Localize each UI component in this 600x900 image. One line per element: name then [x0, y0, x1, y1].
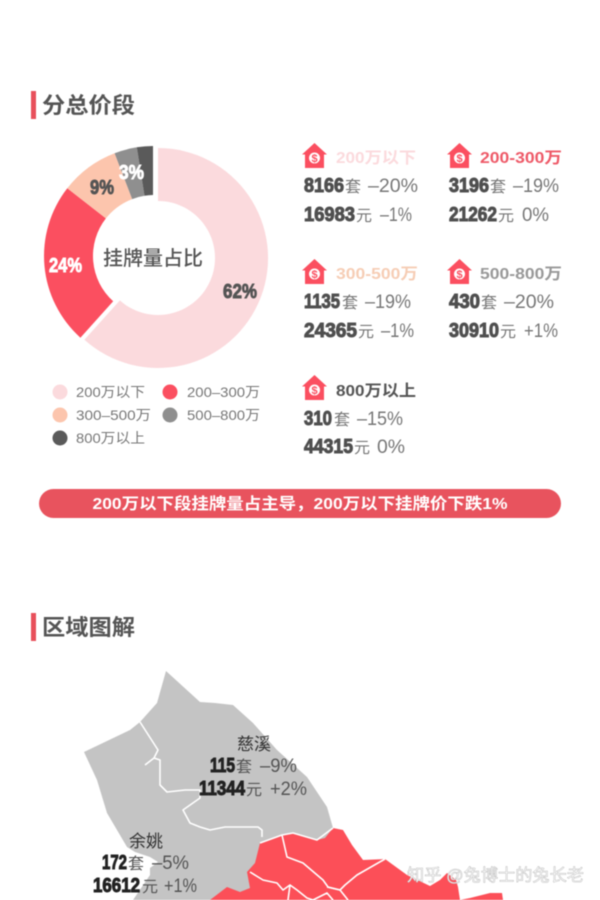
- legend: 200万以下: [76, 384, 145, 400]
- icon: house with dollar: $: [311, 269, 318, 281]
- stat block: over 8M: 800万以上: [336, 382, 416, 400]
- stat block: 3-5M: 套: [342, 294, 358, 312]
- stat block: 2-3M: 21262: [449, 204, 497, 226]
- district label: 余姚: 元: [142, 879, 158, 896]
- legend: 800万以上: [76, 430, 145, 446]
- slice: 5-8M: [115, 147, 144, 199]
- stat block: 3-5M: 1135: [304, 291, 340, 313]
- stat block: 2-3M: 0%: [522, 205, 549, 226]
- legend: [52, 384, 260, 446]
- legend: 500–800万: [187, 407, 260, 423]
- stat block: 2-3M: 元: [498, 208, 514, 225]
- stat block: 3-5M: 300-500万: [336, 266, 418, 283]
- icon: house with dollar: $: [311, 385, 318, 397]
- stat block: under 2M: 元: [356, 208, 372, 225]
- stat block: over 8M: 310: [304, 408, 332, 430]
- district label: 慈溪: –9%: [260, 756, 297, 777]
- stat block: 3-5M: 元: [358, 324, 374, 341]
- watermark: 知乎 @兔博士的兔长老: [407, 866, 584, 885]
- stat block: 5-8M: 元: [500, 324, 516, 341]
- stat block: 3-5M: 24365: [304, 320, 357, 342]
- map region: red districts: [210, 828, 503, 900]
- stat block: under 2M: 16983: [304, 204, 355, 226]
- stat block: 2-3M: –19%: [513, 176, 559, 197]
- map borders: [140, 722, 385, 900]
- map region: grey districts: [84, 671, 345, 900]
- label: 24%: 24%: [49, 255, 82, 277]
- donut chart: listing share: [44, 146, 268, 368]
- label: 9%: 9%: [90, 177, 114, 199]
- district label: 余姚: 套: [128, 855, 144, 873]
- stat block: 5-8M: 500-800万: [480, 266, 562, 283]
- district label: 余姚: –5%: [152, 853, 189, 874]
- stat block: over 8M: 元: [354, 440, 370, 457]
- stat block: 5-8M: 430: [449, 291, 480, 313]
- district label: 慈溪: 元: [246, 782, 262, 799]
- stat block: 2-3M: 3196: [449, 175, 489, 197]
- icon: house with dollar: $: [456, 269, 463, 281]
- district label: 余姚: [93, 832, 197, 897]
- district label: 余姚: 余姚: [129, 832, 163, 851]
- section heading: 区域图解: 区域图解: [42, 615, 135, 640]
- icon: house with dollar: $: [456, 153, 463, 165]
- slice: 2-3M 24%: [44, 188, 113, 338]
- district label: 慈溪: 11344: [199, 778, 246, 800]
- stat block: over 8M: 套: [334, 411, 350, 429]
- donut centre label: 挂牌量占比: [103, 247, 203, 270]
- stat block: 3-5M: –19%: [365, 292, 411, 313]
- district label: 余姚: +1%: [164, 876, 197, 897]
- slice: over 8M: [137, 146, 153, 196]
- stat block: under 2M: 200万以下: [336, 150, 416, 167]
- stat block: under 2M: –20%: [368, 176, 418, 197]
- district label: 慈溪: 115: [210, 755, 235, 777]
- legend: 300–500万: [76, 407, 151, 423]
- district label: 慈溪: +2%: [270, 779, 307, 800]
- label: 62%: 62%: [223, 281, 257, 303]
- stat block: under 2M: 套: [345, 178, 361, 196]
- district label: 余姚: 16612: [93, 875, 140, 897]
- stat block: 5-8M: 30910: [449, 320, 499, 342]
- legend: 200–300万: [187, 384, 260, 400]
- stat block: 3-5M: –1%: [381, 321, 414, 342]
- stat block: over 8M: 44315: [304, 436, 353, 458]
- callout banner: 200万以下段挂牌量占主导，200万以下挂牌价下跌1%: [92, 494, 508, 513]
- district label: 慈溪: 套: [236, 758, 252, 776]
- icon: house with dollar: $: [311, 153, 318, 165]
- stat block: 5-8M: –20%: [504, 292, 554, 313]
- stat block: 5-8M: [447, 259, 562, 342]
- stat block: under 2M: –1%: [380, 205, 412, 226]
- map of Ningbo districts: [84, 671, 503, 900]
- slice: under 2M 62%: [84, 148, 268, 368]
- label: 3%: 3%: [119, 162, 144, 184]
- stat block: over 8M: –15%: [357, 409, 403, 430]
- stat block: 3-5M: [302, 259, 418, 342]
- stat block: under 2M: 8166: [304, 175, 344, 197]
- stat block: 5-8M: 套: [481, 294, 497, 312]
- stat block: over 8M: [302, 375, 416, 458]
- stat block: 2-3M: [447, 143, 562, 226]
- slice: 3-5M 9%: [67, 153, 132, 218]
- callout banner: [39, 489, 561, 518]
- stat block: 5-8M: +1%: [524, 321, 558, 342]
- district label: 余姚: 172: [102, 852, 127, 874]
- stat block: under 2M: [302, 143, 418, 226]
- district label: 慈溪: [199, 735, 307, 800]
- stat block: 2-3M: 套: [490, 178, 506, 196]
- stat block: over 8M: 0%: [377, 437, 405, 458]
- district label: 慈溪: 慈溪: [237, 735, 271, 754]
- section heading: 分总价段: 分总价段: [42, 93, 135, 118]
- stat block: 2-3M: 200-300万: [480, 150, 562, 167]
